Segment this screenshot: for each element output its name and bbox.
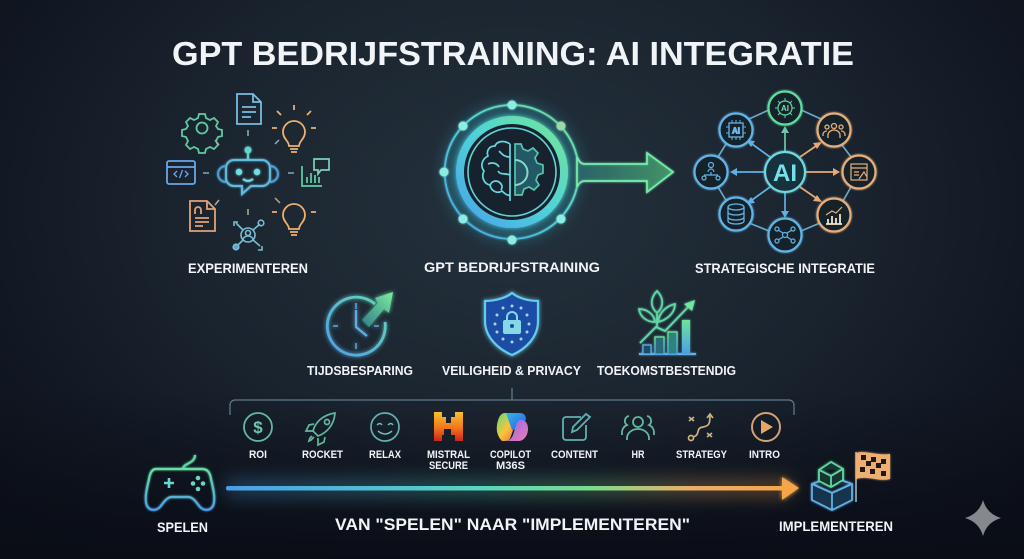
panel: implementeren — [779, 452, 893, 534]
panel: spelen — [146, 455, 214, 535]
panel: tool row — [244, 412, 780, 472]
caption: VAN "SPELEN" NAAR "IMPLEMENTEREN" — [335, 515, 690, 534]
arrow: green output arrow — [577, 153, 673, 192]
node: AI chip: AI — [732, 126, 740, 136]
icon: clock with arrow — [327, 292, 393, 355]
panel: toekomstbestendig — [597, 291, 736, 378]
icon: checkered flag — [856, 452, 890, 502]
node: AI chip — [720, 114, 752, 146]
connector ticks — [203, 130, 294, 215]
icon: stacked cubes — [812, 462, 852, 510]
item: HR: HR — [632, 449, 645, 461]
node: dashboard — [842, 156, 876, 188]
label: experimenteren: EXPERIMENTEREN — [188, 260, 308, 276]
item: strategy — [676, 414, 728, 461]
icon: chart with speech bubble — [302, 159, 329, 186]
icon: light bulb top — [272, 105, 316, 152]
icon: growth plant — [639, 291, 696, 354]
arrow: input line — [353, 171, 444, 173]
item: copilot m36s: COPILOT — [490, 449, 531, 461]
item: HR — [622, 416, 654, 461]
item: mistral secure: SECURE — [429, 460, 468, 472]
item: ROI: $ — [253, 418, 263, 437]
item: mistral secure — [427, 412, 470, 472]
panel: veiligheid en privacy — [442, 293, 581, 378]
node: AI network — [768, 92, 802, 124]
core dial — [460, 120, 564, 224]
panel: strategische integratie — [694, 92, 876, 276]
icon: light bulb bottom — [272, 204, 316, 235]
item: rocket — [302, 413, 343, 461]
item: relax — [369, 413, 402, 461]
icon: EU shield with padlock — [485, 293, 538, 355]
outer ring with nodes — [440, 100, 577, 244]
item: relax: RELAX — [369, 449, 402, 461]
item: rocket: ROCKET — [302, 449, 343, 461]
item: content — [551, 414, 598, 461]
item: intro: INTRO — [749, 449, 780, 461]
icon: game controller — [146, 455, 214, 510]
panel: experimenteren — [167, 94, 329, 276]
title: GPT BEDRIJFSTRAINING: AI INTEGRATIE — [172, 35, 854, 72]
icon: resume document — [190, 201, 215, 231]
item: strategy: STRATEGY — [676, 449, 728, 461]
node: team — [818, 114, 850, 146]
icon: brain and gear — [482, 142, 543, 201]
node: graph — [768, 218, 802, 252]
item: copilot m36s — [490, 413, 531, 472]
stars — [494, 304, 530, 344]
icon: document — [237, 94, 261, 124]
icon: gear — [182, 114, 222, 153]
label: tijdsbesparing: TIJDSBESPARING — [307, 363, 413, 378]
icon: robot — [218, 146, 278, 194]
connections — [718, 109, 851, 231]
glow — [446, 106, 578, 238]
label: toekomstbestendig: TOEKOMSTBESTENDIG — [597, 363, 736, 378]
label: strategische integratie: STRATEGISCHE INTEGRATIE — [695, 260, 875, 276]
node: AI network: AI — [781, 104, 789, 113]
node: central AI — [765, 152, 805, 192]
node: hierarchy — [694, 156, 728, 188]
icon: network person — [233, 220, 264, 250]
node: central AI: AI — [773, 160, 797, 187]
label: implementeren: IMPLEMENTEREN — [779, 518, 893, 534]
item: intro — [749, 413, 780, 461]
arrowheads — [730, 126, 840, 218]
bracket — [230, 388, 794, 415]
item: mistral secure: MISTRAL — [427, 449, 470, 461]
icon: padlock — [503, 312, 521, 334]
icon: code window — [167, 161, 195, 184]
label: veiligheid en privacy: VEILIGHEID & PRIVACY — [442, 363, 581, 378]
item: copilot m36s: M36S — [496, 460, 525, 472]
panel: gpt bedrijfstraining — [353, 100, 673, 275]
icon: sparkle watermark — [965, 500, 1001, 536]
item: content: CONTENT — [551, 449, 598, 461]
panel: tijdsbesparing — [307, 292, 413, 378]
item: ROI — [244, 413, 272, 461]
item: ROI: ROI — [249, 449, 267, 461]
node: database — [720, 198, 752, 230]
arrow: timeline — [226, 477, 799, 500]
node: growth chart — [818, 198, 850, 232]
label: spelen: SPELEN — [157, 519, 208, 535]
label: gpt bedrijfstraining: GPT BEDRIJFSTRAINING — [424, 259, 600, 275]
